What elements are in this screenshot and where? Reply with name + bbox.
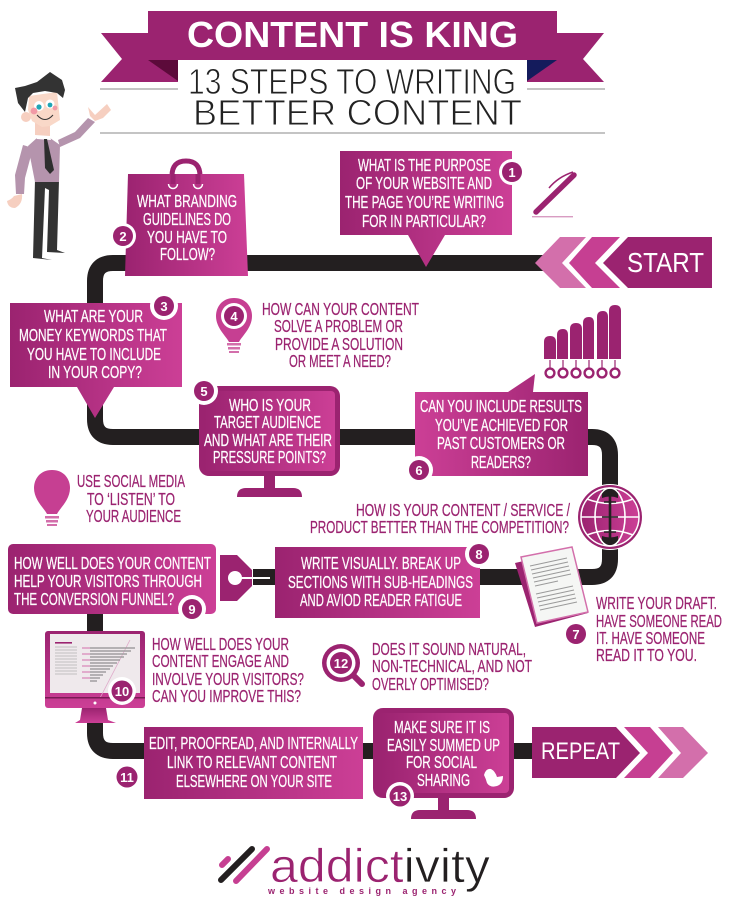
step 11 panel: EDIT, PROOFREAD, AND INTERNALLY	[149, 733, 358, 753]
logo: addictivity	[270, 839, 491, 892]
tip: bulb and social media text	[34, 470, 185, 526]
step 13 panel: monitor: SHARING	[417, 770, 470, 790]
step 10 text	[152, 634, 304, 706]
step 6 panel: YOU’VE ACHIEVED FOR	[435, 415, 568, 435]
title ribbon: CONTENT IS KING	[187, 14, 518, 55]
subtitle: 13 STEPS TO WRITING	[188, 61, 516, 102]
step 11 panel	[116, 727, 363, 799]
step 5 panel: monitor	[190, 377, 340, 497]
step 11 panel: 11	[120, 770, 134, 785]
step 1 panel: FOR IN PARTICULAR?	[362, 211, 486, 231]
step 2 panel: bag	[110, 161, 248, 276]
step 4: bulb icon and text	[216, 298, 419, 371]
step 5 panel: monitor: 5	[200, 384, 208, 399]
step 12: magnifier icon and text	[322, 639, 532, 694]
logo: website design agency	[267, 886, 456, 896]
connector plug	[220, 555, 270, 601]
step 4: bulb icon and text: 4	[230, 309, 238, 324]
step 8 panel	[275, 540, 493, 618]
character illustration	[7, 72, 111, 260]
step 8 panel: WRITE VISUALLY. BREAK UP	[301, 553, 461, 573]
step 10 text: CONTENT ENGAGE AND	[152, 651, 289, 671]
subtitle: BETTER CONTENT	[193, 92, 522, 133]
step 4: bulb icon and text: SOLVE A PROBLEM OR	[274, 316, 403, 336]
repeat arrow: REPEAT	[541, 738, 620, 765]
step 11 panel: LINK TO RELEVANT CONTENT	[167, 752, 337, 772]
step 7 text	[566, 593, 722, 665]
step 8 panel: AND AVIOD READER FATIGUE	[300, 590, 462, 610]
repeat arrow	[532, 727, 708, 778]
step 2 panel: bag: 2	[119, 229, 127, 244]
step 2 panel: bag: GUIDELINES DO	[143, 209, 231, 229]
text: how is your content better: HOW IS YOUR CONTENT / SERVICE /	[356, 500, 570, 520]
step 6 panel: PAST CUSTOMERS OR	[437, 433, 565, 453]
step 13 panel: monitor: EASILY SUMMED UP	[387, 735, 500, 755]
start arrow: START	[627, 247, 704, 278]
step 3 panel	[10, 292, 182, 418]
step 3 panel: 3	[160, 299, 168, 314]
step 5 panel: monitor: AND WHAT ARE THEIR	[204, 430, 332, 450]
start arrow	[535, 237, 712, 288]
step 8 panel: 8	[475, 547, 483, 562]
step 6 panel: READERS?	[471, 452, 531, 472]
step 2 panel: bag: FOLLOW?	[160, 244, 215, 264]
step 12: magnifier icon and text: NON-TECHNICAL, AND NOT	[372, 656, 532, 676]
bar chart icon	[544, 305, 621, 377]
step 4: bulb icon and text: OR MEET A NEED?	[289, 351, 391, 371]
step 9 panel: THE CONVERSION FUNNEL?	[14, 589, 174, 609]
text: how is your content better: PRODUCT BETTER THAN THE COMPETITION?	[310, 517, 569, 537]
step 11 panel: ELSEWHERE ON YOUR SITE	[176, 771, 332, 791]
text: how is your content better	[310, 500, 570, 537]
step 1 panel: THE PAGE YOU’RE WRITING	[345, 192, 504, 212]
icon: pen	[532, 172, 574, 217]
flow path	[95, 263, 610, 751]
step 12: magnifier icon and text: OVERLY OPTIMISED?	[372, 674, 489, 694]
step 1 panel: OF YOUR WEBSITE AND	[356, 173, 492, 193]
title ribbon	[101, 11, 604, 82]
step 2 panel: bag: YOU HAVE TO	[147, 227, 227, 247]
tip: bulb and social media text: YOUR AUDIENCE	[86, 506, 181, 526]
step 13 panel: monitor: 13	[393, 789, 407, 804]
step 13 panel: monitor: MAKE SURE IT IS	[394, 717, 490, 737]
step 5 panel: monitor: PRESSURE POINTS?	[213, 447, 326, 467]
tip: bulb and social media text: TO ‘LISTEN’ TO	[87, 489, 175, 509]
step 12: magnifier icon and text: 12	[334, 656, 348, 671]
step 3 panel: YOU HAVE TO INCLUDE	[27, 344, 161, 364]
step 10 text: CAN YOU IMPROVE THIS?	[152, 686, 301, 706]
step 5 panel: monitor: WHO IS YOUR	[229, 395, 311, 415]
step 10: monitor icon	[45, 631, 145, 723]
step 6 panel: CAN YOU INCLUDE RESULTS	[420, 396, 582, 416]
subtitle	[100, 61, 605, 134]
step 1 panel: 1	[508, 165, 516, 180]
step 3 panel: IN YOUR COPY?	[48, 362, 142, 382]
step 7 text: 7	[572, 627, 580, 642]
tip: bulb and social media text: USE SOCIAL MEDIA	[77, 471, 185, 491]
step 2 panel: bag: WHAT BRANDING	[137, 191, 237, 211]
icon: globe	[577, 484, 643, 550]
step 13 panel: monitor: FOR SOCIAL	[406, 752, 477, 772]
step 10 text: HOW WELL DOES YOUR	[152, 634, 289, 654]
step 4: bulb icon and text: HOW CAN YOUR CONTENT	[262, 299, 419, 319]
step 3 panel: WHAT ARE YOUR	[44, 306, 143, 326]
step 8 panel: SECTIONS WITH SUB-HEADINGS	[288, 572, 473, 592]
step 10: monitor icon: 10	[115, 684, 129, 699]
step 4: bulb icon and text: PROVIDE A SOLUTION	[275, 334, 403, 354]
step 6 panel	[405, 374, 588, 484]
step 1 panel	[340, 151, 525, 267]
step 9 panel: 9	[188, 602, 196, 617]
step 5 panel: monitor: TARGET AUDIENCE	[214, 412, 321, 432]
step 13 panel: monitor	[373, 708, 514, 819]
step 6 panel: 6	[415, 463, 423, 478]
icon: draft document	[515, 547, 588, 627]
step 9 panel: HOW WELL DOES YOUR CONTENT	[14, 553, 211, 573]
step 9 panel	[8, 544, 216, 623]
step 10 text: INVOLVE YOUR VISITORS?	[152, 669, 304, 689]
step 9 panel: HELP YOUR VISITORS THROUGH	[14, 571, 202, 591]
step 1 panel: WHAT IS THE PURPOSE	[358, 155, 491, 175]
step 3 panel: MONEY KEYWORDS THAT	[19, 325, 167, 345]
step 12: magnifier icon and text: DOES IT SOUND NATURAL,	[372, 639, 526, 659]
